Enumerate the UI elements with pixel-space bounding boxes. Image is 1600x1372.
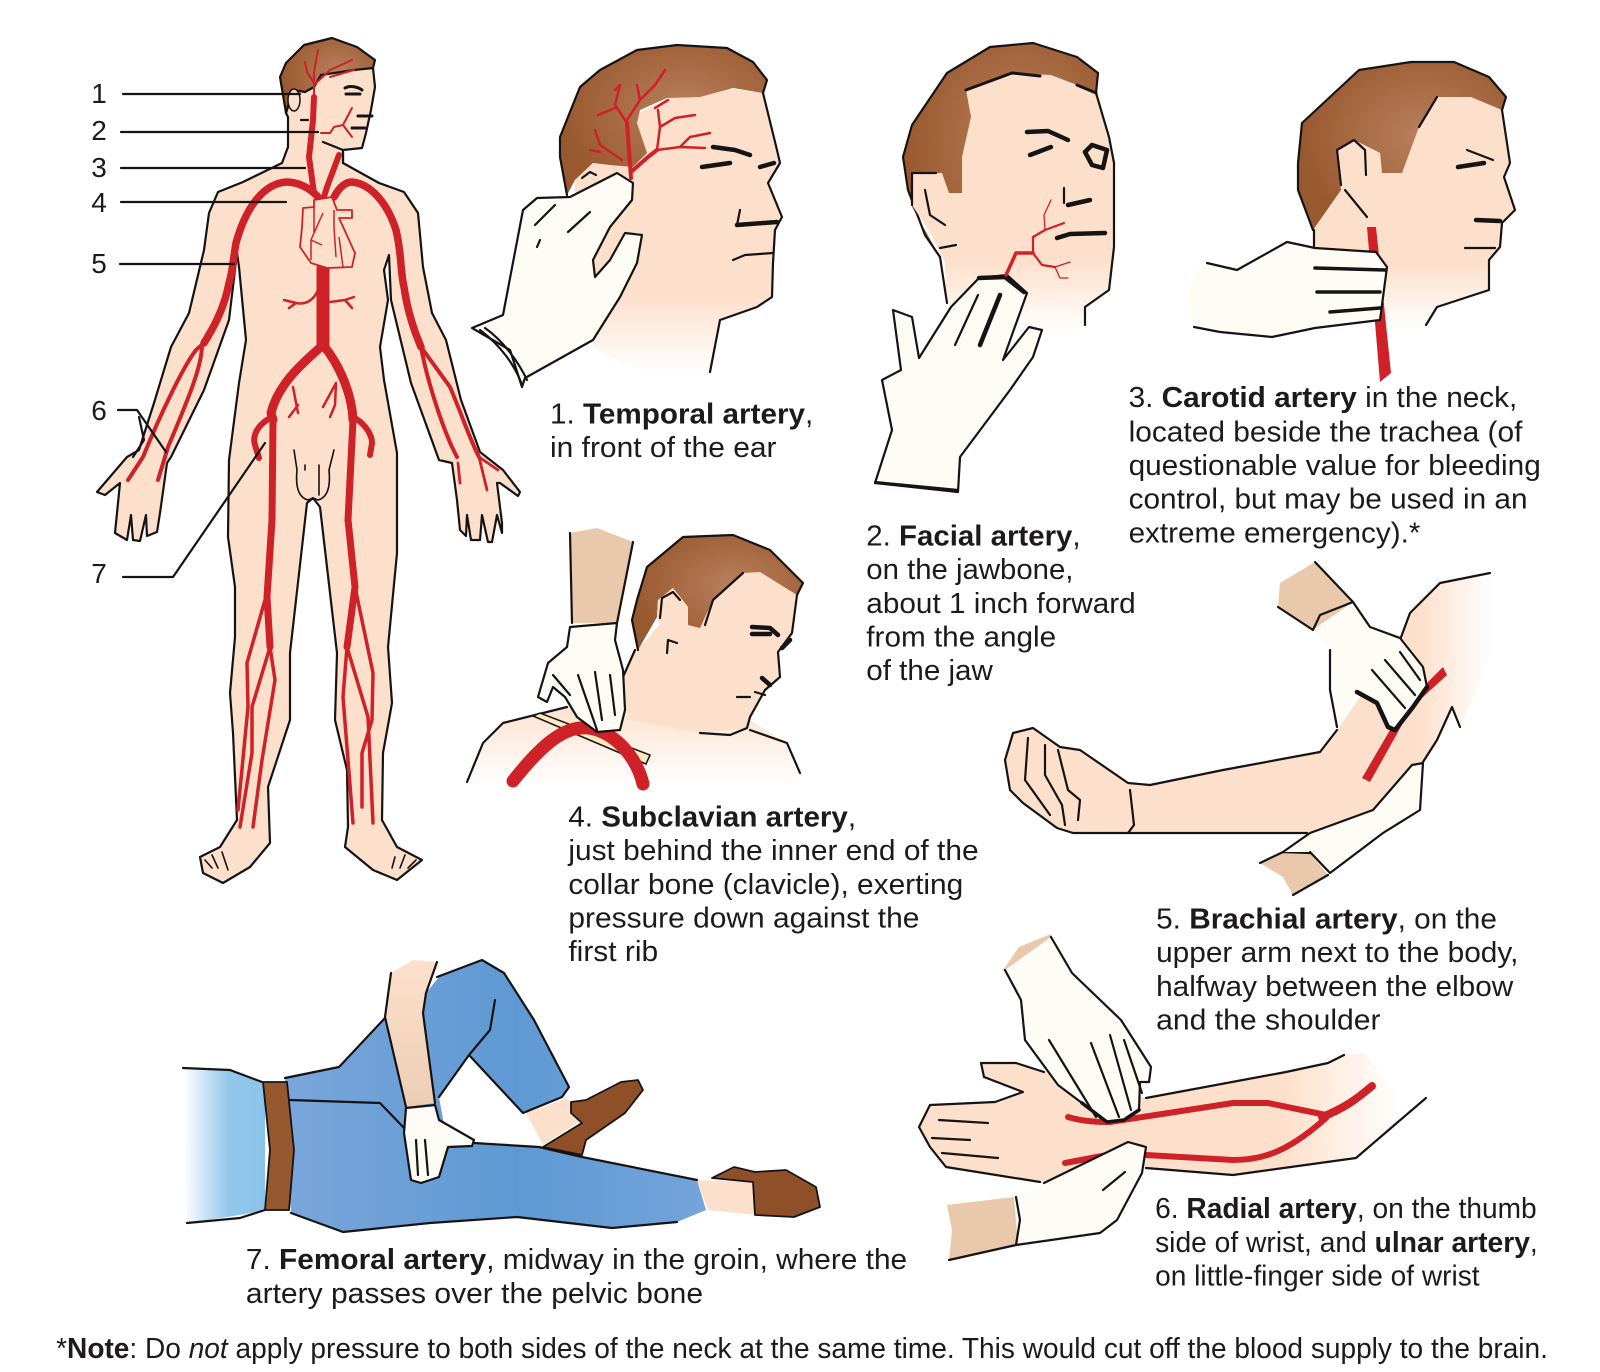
caption: subclavian artery: first rib — [568, 936, 658, 968]
label numbers: 1 — [91, 78, 107, 109]
ear — [657, 588, 688, 650]
caption: subclavian artery: just behind the inner end of the — [567, 835, 979, 867]
caption: temporal artery: 1. Temporal artery , — [550, 398, 813, 430]
shoe upper — [543, 1080, 643, 1155]
ear — [912, 173, 956, 248]
caption: brachial artery: and the shoulder — [1156, 1005, 1381, 1037]
shoe lower — [712, 1167, 820, 1217]
label numbers: 5 — [91, 248, 107, 279]
caption: facial artery — [866, 520, 1136, 687]
foot toes — [205, 852, 416, 870]
label numbers: 3 — [91, 152, 107, 183]
caption: subclavian artery: 4. Subclavian artery , — [568, 802, 856, 834]
sleeve lower — [947, 1197, 1018, 1260]
panel: radial and ulnar artery illustration — [919, 934, 1426, 1260]
caption: femoral artery: artery passes over the pelvic bone — [246, 1278, 703, 1310]
facial features — [1027, 131, 1107, 238]
caption: carotid artery — [1129, 382, 1541, 549]
caption: brachial artery: halfway between the elbow — [1156, 971, 1514, 1003]
caption: radial artery: 6. Radial artery, on the thumb — [1155, 1193, 1537, 1225]
glove lower — [1283, 763, 1423, 873]
caption: carotid artery: 3. Carotid artery in the neck, — [1129, 382, 1517, 414]
carotid artery — [1367, 227, 1391, 382]
glove — [538, 623, 625, 732]
hand and forearm — [919, 1053, 1426, 1182]
hair — [280, 38, 375, 113]
panel: carotid artery illustration — [1185, 62, 1515, 382]
caption: temporal artery — [550, 398, 813, 464]
sleeve — [570, 528, 633, 623]
caption: radial artery: side of wrist, and ulnar artery, — [1155, 1227, 1538, 1259]
temporal artery — [590, 70, 710, 178]
label numbers: 7 — [91, 558, 107, 589]
glove — [1185, 242, 1387, 337]
caption: brachial artery: upper arm next to the body, — [1156, 937, 1518, 969]
hair — [1298, 62, 1506, 230]
ear — [575, 163, 620, 195]
label numbers — [91, 78, 107, 589]
caption: carotid artery: questionable value for bleeding — [1129, 450, 1541, 482]
shirt at left — [183, 1068, 265, 1223]
footnote: *Note: Do not apply pressure to both sides of the neck at the same time. This would cut off the blood supply to the brain. — [56, 1333, 1548, 1365]
caption: radial artery — [1155, 1193, 1538, 1293]
radial and ulnar arteries — [1065, 1103, 1326, 1163]
caption: carotid artery: located beside the trachea (of — [1129, 416, 1522, 448]
facial features — [1458, 163, 1500, 221]
panel: femoral artery illustration — [183, 960, 820, 1232]
caption: facial artery: about 1 inch forward — [866, 588, 1136, 620]
caption: facial artery: on the jawbone, — [866, 554, 1073, 586]
glove — [875, 275, 1042, 492]
sleeve top — [1278, 562, 1353, 630]
caption: carotid artery: extreme emergency).* — [1129, 517, 1420, 549]
caption: temporal artery: in front of the ear — [550, 432, 777, 464]
arm — [1005, 573, 1493, 833]
panel: brachial artery illustration — [1005, 562, 1493, 895]
face — [590, 85, 782, 372]
face and neck — [1314, 80, 1515, 330]
caption: femoral artery: 7. Femoral artery , midway in the groin, where the — [246, 1244, 907, 1276]
caption: carotid artery: control, but may be used in an — [1129, 484, 1528, 516]
hair — [903, 43, 1098, 257]
glove — [404, 1105, 474, 1183]
face features — [345, 87, 372, 128]
caption: subclavian artery: collar bone (clavicle), exerting — [568, 869, 963, 901]
caption: facial artery: of the jaw — [866, 655, 993, 687]
heart — [300, 197, 355, 268]
body silhouette — [97, 68, 520, 883]
caption: femoral artery — [246, 1244, 907, 1310]
ankle upper — [526, 1098, 582, 1145]
shoulders and neck — [467, 600, 800, 785]
panel: subclavian artery illustration — [467, 528, 803, 785]
caption: facial artery: 2. Facial artery, — [866, 520, 1081, 552]
ankle lower — [697, 1180, 755, 1215]
jeans — [285, 960, 706, 1232]
face — [915, 60, 1114, 332]
brachial artery — [1362, 667, 1447, 782]
panel: facial artery illustration — [875, 43, 1114, 492]
facial artery — [1006, 200, 1070, 278]
glove upper — [1313, 602, 1427, 730]
facial features — [752, 627, 790, 685]
caption: facial artery: from the angle — [866, 621, 1056, 653]
hair — [560, 45, 767, 195]
panel: full-body artery diagram — [91, 38, 520, 883]
facial features — [702, 147, 777, 225]
sleeve lower — [1260, 852, 1328, 895]
belt — [263, 1082, 294, 1210]
bare arm — [385, 960, 437, 1107]
glove upper — [1003, 934, 1052, 972]
hair — [632, 535, 803, 650]
label numbers: 4 — [91, 187, 107, 218]
label numbers: 6 — [91, 395, 107, 426]
genitals — [294, 450, 334, 500]
collar bone — [533, 713, 650, 764]
subclavian artery — [513, 728, 643, 784]
ear — [1337, 140, 1382, 217]
face — [623, 555, 797, 733]
label numbers: 2 — [91, 115, 107, 146]
caption: subclavian artery: pressure down against the — [568, 903, 919, 935]
panel: temporal artery illustration — [472, 45, 782, 387]
caption: subclavian artery — [567, 802, 979, 968]
glove — [472, 173, 642, 387]
arteries — [128, 50, 498, 827]
caption: radial artery: on little-finger side of wrist — [1155, 1261, 1480, 1293]
label lines — [118, 94, 318, 577]
caption: brachial artery: 5. Brachial artery , on the — [1156, 904, 1497, 936]
caption: brachial artery — [1156, 904, 1518, 1037]
ear — [288, 89, 300, 111]
glove lower — [1016, 1142, 1146, 1245]
